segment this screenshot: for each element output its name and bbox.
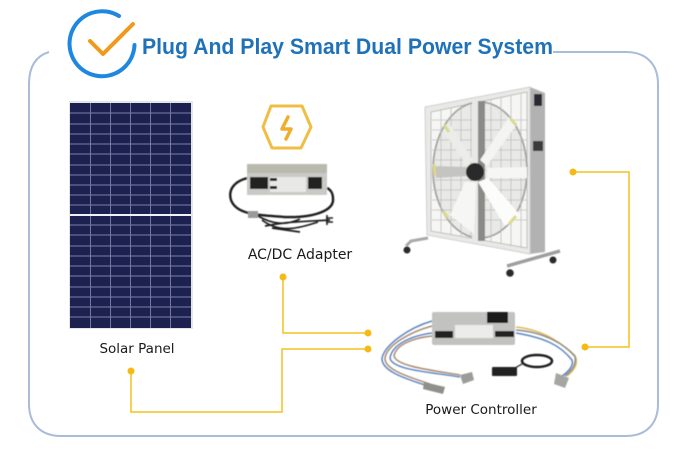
fan frame front [425,87,530,254]
connector: adapter to controller [280,274,372,336]
icon: hexagon with lightning bolt [263,106,311,148]
label: solar panel: Solar Panel [99,341,175,357]
power controller image [382,312,576,394]
AC/DC adapter image [230,164,333,232]
fan side column [530,87,545,254]
panel: rounded outline [29,52,658,436]
title: Plug And Play Smart Dual Power System [142,34,553,59]
solar panel image [69,101,193,329]
fan stand [406,238,428,246]
fan image [404,87,560,277]
fan control boxes [534,94,542,106]
connector: fan to controller [570,168,629,350]
connector: solar panel to controller [128,346,372,412]
label: power controller: Power Controller [425,402,537,418]
label: AC/DC adapter: AC/DC Adapter [248,247,352,263]
icon: blue circle with orange check [70,11,134,76]
